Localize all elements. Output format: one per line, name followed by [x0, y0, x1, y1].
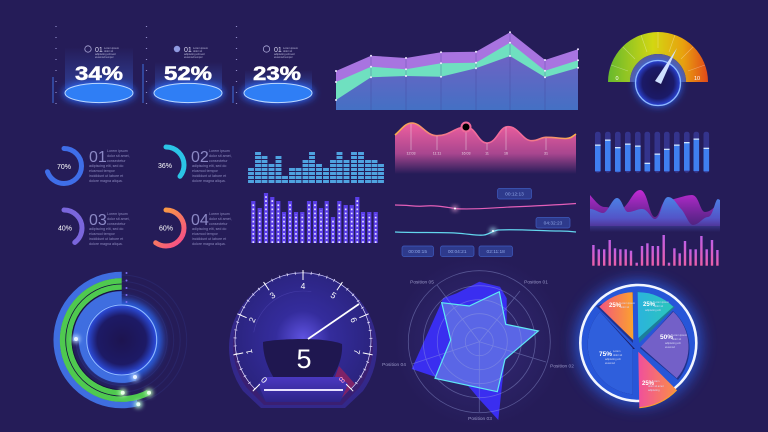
text block 04: adipiscing elit, sed do: [192, 227, 226, 231]
text block 02: incididunt ut labore et: [192, 174, 226, 178]
pie chart: dolor sit: [620, 305, 629, 309]
donut 36%: 36%: [158, 163, 172, 170]
pie chart: 25%: [643, 302, 656, 308]
slider bars: [595, 132, 709, 173]
badge 02:11:18: 02:11:18: [487, 249, 505, 255]
panel: KPI 23%: [233, 26, 314, 104]
magenta and blue area chart: [590, 190, 720, 232]
speedometer: 3: [268, 290, 277, 301]
pie chart: eiusmod: [605, 361, 615, 365]
radar chart: [382, 257, 574, 427]
text block 01: [89, 149, 130, 183]
pie chart: 50%: [660, 334, 673, 341]
pie chart: 25%: [609, 303, 622, 309]
text block 04: dolore magna aliqua.: [192, 242, 226, 246]
donut 70%: 70%: [57, 164, 71, 171]
panel: KPI 34%: 34%: [75, 63, 123, 85]
badge 00:12:13: [498, 188, 532, 199]
speedometer: 1: [244, 348, 254, 355]
radar chart: Position 05: [410, 280, 434, 286]
blue equalizer: [251, 151, 381, 183]
pink bars: [592, 235, 719, 266]
text block 03: adipiscing elit, sed do: [89, 227, 123, 231]
badge 04:32:23: 04:32:23: [544, 220, 563, 226]
panel: KPI 23%: dolor sit: [283, 49, 292, 53]
text block 03: dolor sit amet,: [107, 217, 130, 221]
text block 04: eiusmod tempor: [192, 232, 219, 236]
text block 01: adipiscing elit, sed do: [89, 164, 123, 168]
text block 02: 02: [191, 149, 209, 166]
pink wave chart: 31: [544, 152, 548, 156]
text block 04: [191, 212, 232, 246]
pink wave chart: 12:03: [406, 152, 416, 156]
pink wave chart: 11: [485, 152, 489, 156]
text block 02: dolor sit amet,: [209, 154, 232, 158]
speedometer: 7: [352, 348, 362, 355]
pie chart: Lorem ipsum: [620, 301, 635, 305]
pie chart: 75%: [599, 351, 612, 358]
panel: KPI 23%: 01: [274, 47, 282, 54]
pie chart: adipiscing elit: [605, 357, 621, 361]
pie chart: [576, 281, 700, 408]
speedometer: 5: [296, 344, 312, 374]
speedometer: 6: [348, 316, 359, 324]
panel: KPI 52%: 52%: [164, 63, 212, 85]
pink wave chart: 11:11: [433, 152, 441, 156]
pie chart: adipiscing elit: [665, 341, 681, 345]
text block 03: consectetur: [107, 222, 126, 226]
purple dot equalizer: [253, 193, 376, 243]
text block 03: Lorem ipsum: [107, 212, 128, 216]
radar chart: Position 01: [524, 280, 548, 286]
donut 36%: [148, 147, 184, 183]
panel: KPI 34%: eiusmod tempor: [95, 55, 114, 59]
text block 04: dolor sit amet,: [209, 217, 232, 221]
panel: KPI 34%: adipiscing elit sed: [95, 52, 116, 56]
panel: KPI 23%: Lorem ipsum: [283, 46, 298, 50]
panel: KPI 34%: 01: [95, 47, 103, 54]
badge 02:11:18: [479, 246, 512, 256]
donut 60%: 60%: [159, 226, 173, 232]
donut 40%: [46, 210, 82, 246]
donut 70%: [46, 148, 82, 184]
pie chart: Lorem ipsum: [672, 333, 687, 337]
badge 00:04:21: [440, 246, 474, 256]
pie chart: Lorem ipsum: [654, 300, 669, 304]
badge 04:32:23: [536, 218, 570, 228]
panel: KPI 23%: eiusmod tempor: [274, 55, 293, 59]
pie chart: Lorem: [652, 379, 659, 383]
text block 04: incididunt ut labore et: [192, 237, 226, 241]
text block 04: Lorem ipsum: [209, 212, 230, 216]
panel: KPI 52%: [143, 26, 224, 104]
badge 00:00:15: [402, 246, 434, 256]
pie chart: adipiscing: [648, 388, 660, 392]
pie chart: Lorem: [613, 349, 620, 353]
text block 01: 01: [89, 149, 107, 166]
pie chart: dolor sit amet: [648, 384, 664, 388]
donut 40%: 40%: [58, 226, 72, 232]
gauge: 0: [615, 76, 619, 82]
text block 03: dolore magna aliqua.: [89, 242, 123, 246]
text block 04: consectetur: [209, 222, 228, 226]
radial ring chart: [57, 272, 187, 408]
radar chart: Position 03: [468, 416, 492, 422]
text block 02: Lorem ipsum: [209, 149, 230, 153]
speedometer: [229, 270, 377, 408]
panel: KPI 23%: 23%: [253, 63, 301, 85]
badge 00:04:21: 00:04:21: [448, 249, 467, 255]
radar chart: Position 04: [382, 362, 406, 368]
text block 04: 04: [191, 212, 209, 229]
pie chart: 25%: [642, 381, 655, 387]
panel: KPI 34%: Lorem ipsum: [104, 46, 119, 50]
pink wave chart: [395, 122, 576, 174]
panel: KPI 23%: adipiscing elit sed: [274, 52, 295, 56]
panel: KPI 52%: dolor sit: [193, 49, 202, 53]
text block 03: 03: [89, 212, 107, 229]
speedometer: 4: [301, 281, 306, 291]
badge 00:00:15: 00:00:15: [408, 249, 427, 255]
text block 02: consectetur: [209, 159, 228, 163]
speedometer: 0: [259, 374, 269, 385]
text block 01: dolore magna aliqua.: [89, 179, 123, 183]
stacked area chart: [335, 31, 579, 110]
timeline: cyan line: [395, 228, 576, 235]
pie chart: dolor sit: [654, 304, 663, 308]
pie chart: dolor sit: [613, 353, 622, 357]
badge 00:12:13: 00:12:13: [505, 192, 524, 198]
text block 02: dolore magna aliqua.: [192, 179, 226, 183]
panel: KPI 52%: adipiscing elit sed: [184, 52, 205, 56]
pie chart: adipiscing elit: [645, 308, 661, 312]
text block 01: consectetur: [107, 159, 126, 163]
text block 03: eiusmod tempor: [89, 232, 116, 236]
text block 01: eiusmod tempor: [89, 169, 116, 173]
pie chart: eiusmod: [665, 345, 675, 349]
text block 01: dolor sit amet,: [107, 154, 130, 158]
pink wave chart: 16: [504, 152, 508, 156]
gauge: [608, 32, 708, 106]
timeline: pink line: [395, 204, 576, 212]
speedometer: 8: [336, 375, 347, 385]
text block 02: eiusmod tempor: [192, 169, 219, 173]
text block 03: incididunt ut labore et: [89, 237, 123, 241]
text block 03: [89, 212, 130, 246]
speedometer: 5: [329, 290, 339, 301]
panel: KPI 52%: Lorem ipsum: [193, 46, 208, 50]
text block 02: [191, 149, 232, 183]
text block 01: incididunt ut labore et: [89, 174, 123, 178]
gauge: 10: [694, 76, 700, 82]
panel: KPI 52%: 01: [184, 47, 192, 54]
panel: KPI 52%: eiusmod tempor: [184, 55, 203, 59]
donut 60%: [148, 210, 184, 246]
text block 01: Lorem ipsum: [107, 149, 128, 153]
panel: KPI 34%: [53, 26, 135, 104]
radar chart: Position 02: [550, 364, 574, 370]
panel: KPI 34%: dolor sit: [104, 49, 113, 53]
speedometer: 2: [247, 316, 258, 324]
pink wave chart: 16:03: [462, 152, 470, 156]
pie chart: dolor sit: [672, 337, 681, 341]
text block 02: adipiscing elit, sed do: [192, 164, 226, 168]
